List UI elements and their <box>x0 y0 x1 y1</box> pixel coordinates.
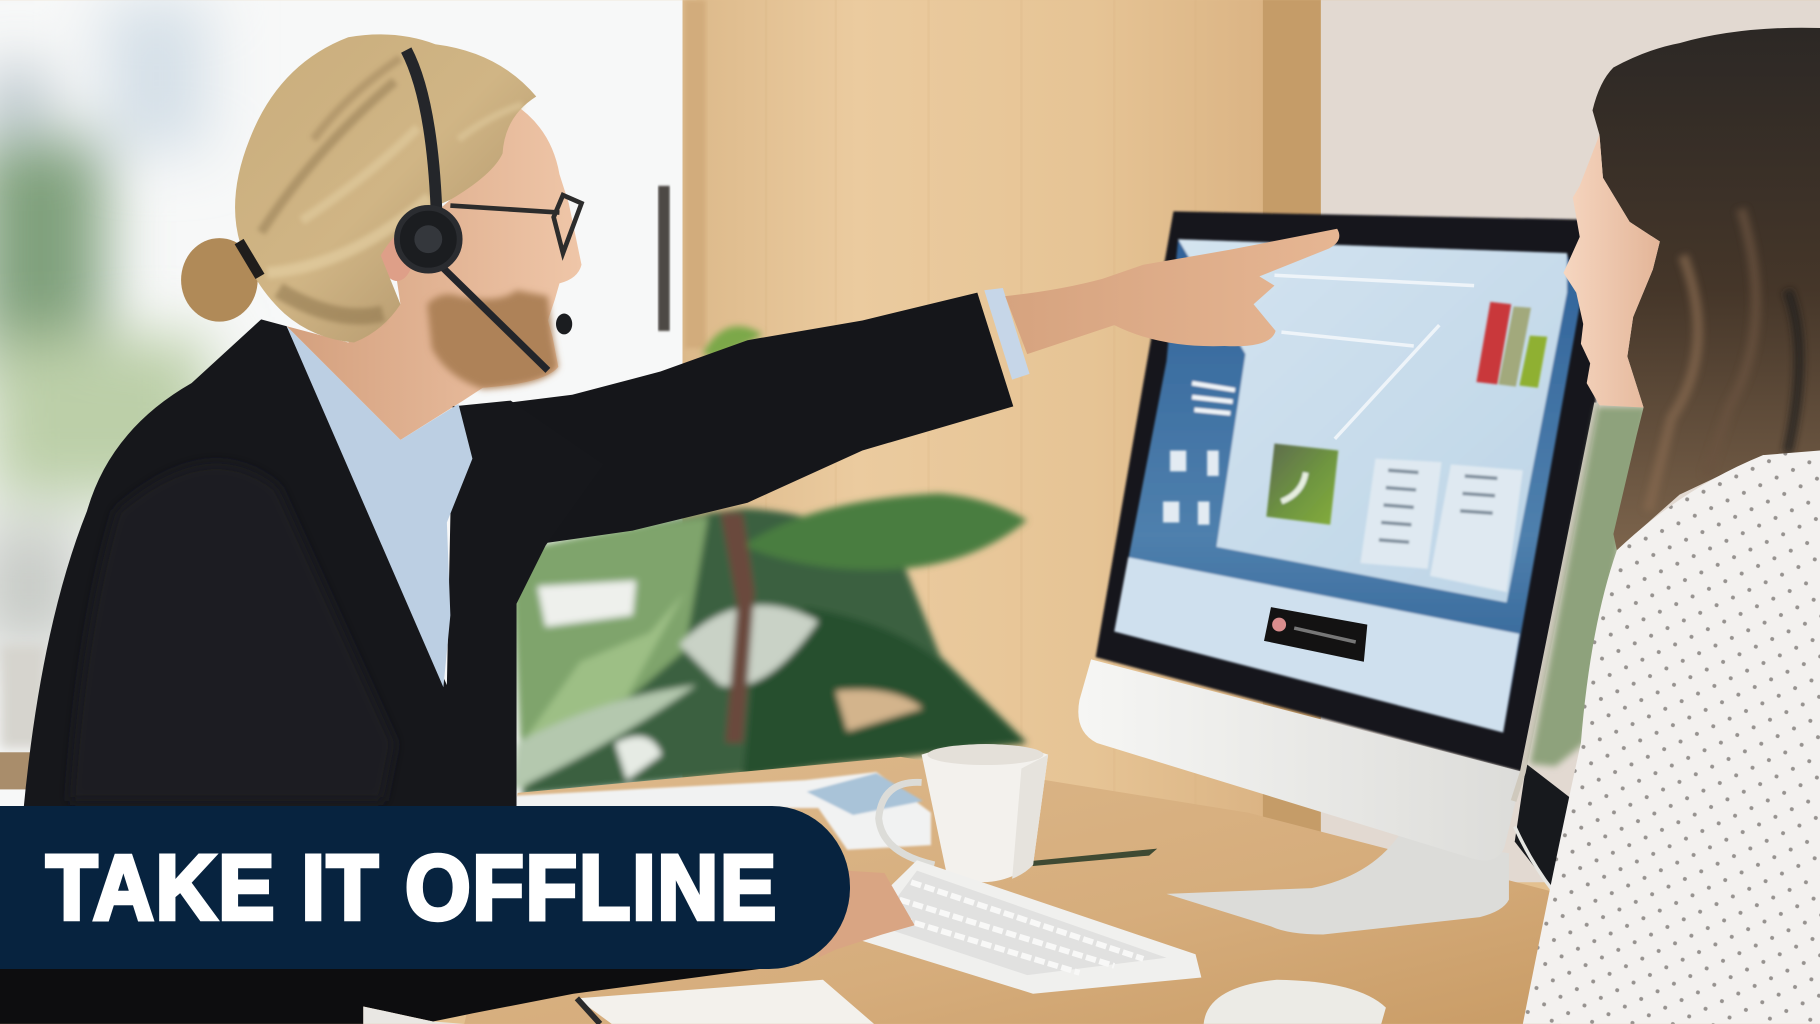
wood panel wall <box>658 0 1820 882</box>
man glasses <box>450 195 582 253</box>
desk <box>464 757 1561 1024</box>
monitor stand <box>1167 836 1509 934</box>
man hair <box>235 34 536 343</box>
coffee mug <box>879 744 1048 882</box>
keyboard <box>853 860 1201 994</box>
woman <box>1523 28 1820 1024</box>
monitor cable <box>1515 827 1555 894</box>
hair tie <box>239 242 260 276</box>
man neck and face <box>287 103 582 440</box>
notebook <box>577 980 874 1024</box>
plant behind woman <box>1530 406 1648 766</box>
shirt cuff <box>984 288 1030 380</box>
monitor silver edge <box>1514 403 1597 801</box>
jacket fabric highlight <box>70 463 395 801</box>
black screen label <box>1264 607 1367 662</box>
document tiles on screen <box>1360 459 1523 592</box>
woman hair <box>1592 28 1820 550</box>
pointing hand <box>1005 229 1339 354</box>
man <box>0 34 1339 968</box>
woman blouse <box>1523 450 1820 1024</box>
monitor chin <box>1078 659 1523 861</box>
man jacket body <box>0 319 604 968</box>
monitor <box>1078 211 1597 934</box>
green tile on screen <box>1266 444 1338 525</box>
window background <box>0 0 696 882</box>
papers on desk <box>479 772 931 850</box>
banner: title <box>0 806 850 969</box>
bar chart on screen <box>1476 302 1547 388</box>
monitor bezel <box>1096 211 1596 772</box>
man bun <box>181 238 258 322</box>
mouse <box>1204 980 1386 1024</box>
paper under sleeve <box>363 1006 464 1024</box>
hair streaks <box>261 58 522 316</box>
woman face <box>1563 135 1660 408</box>
sleeve under banner <box>0 964 801 1024</box>
man shirt <box>287 326 472 687</box>
screen line chart <box>1274 275 1474 439</box>
man headset <box>397 50 572 370</box>
dark pen on desk <box>1027 849 1157 866</box>
man ear <box>380 218 414 281</box>
title text: TAKE IT OFFLINE <box>46 837 778 939</box>
monitor screen <box>1114 239 1581 733</box>
resting hand <box>818 871 915 958</box>
dark cabinet behind monitor <box>1515 764 1582 894</box>
man arm jacket <box>458 293 1013 548</box>
plant <box>511 326 1027 795</box>
left screen icons <box>1163 450 1219 525</box>
hair streaks <box>1648 209 1799 511</box>
man beard <box>427 290 558 389</box>
